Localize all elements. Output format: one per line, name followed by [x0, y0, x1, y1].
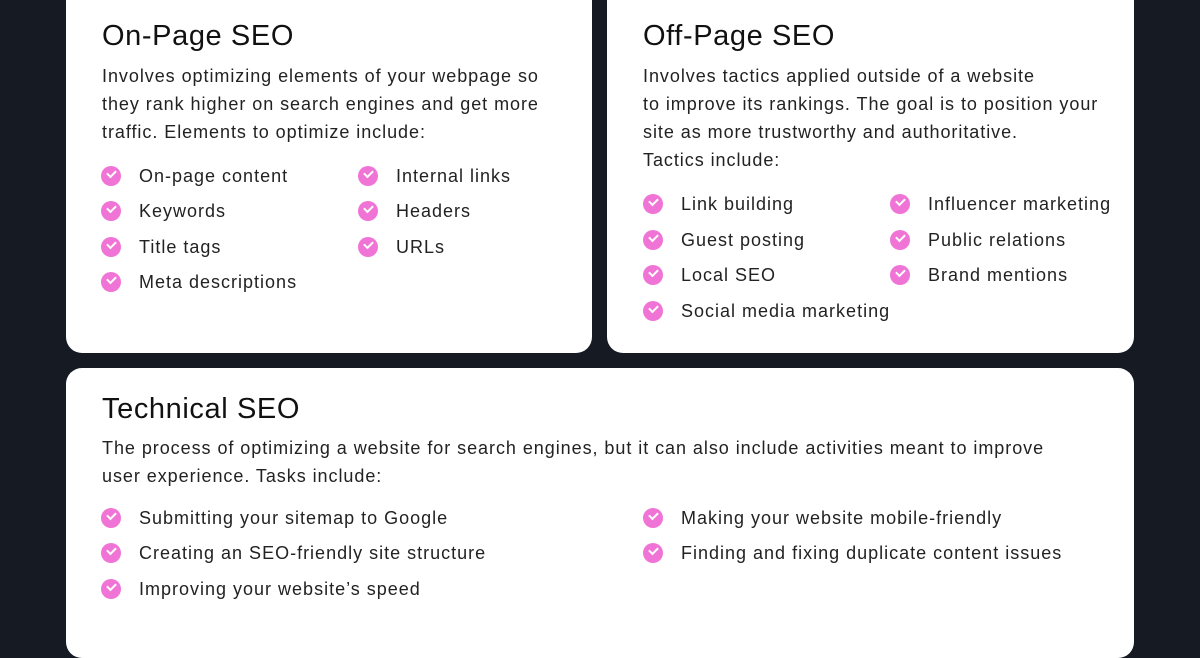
- list: technical tasks: Submitting your sitemap to Google: [139, 508, 448, 528]
- heading: Technical SEO: Technical SEO: [102, 393, 300, 425]
- panel: off-page SEO: [607, 0, 1134, 353]
- list: on-page elements: Title tags: [139, 237, 221, 257]
- list: technical tasks: Making your website mobile-friendly: [681, 508, 1002, 528]
- list: on-page elements: Keywords: [139, 201, 226, 221]
- list: on-page elements: URLs: [396, 237, 445, 257]
- list: on-page elements: Meta descriptions: [139, 272, 297, 292]
- list: off-page tactics: Public relations: [928, 230, 1066, 250]
- text: technical description: [102, 438, 1044, 486]
- list: off-page tactics: [643, 194, 1111, 321]
- list: off-page tactics: Local SEO: [681, 265, 776, 285]
- list: off-page tactics: Link building: [681, 194, 794, 214]
- text: technical description: user experience. Tasks include:: [102, 466, 382, 486]
- list: on-page elements: Headers: [396, 201, 471, 221]
- list: off-page tactics: Social media marketing: [681, 301, 890, 321]
- list: off-page tactics: Guest posting: [681, 230, 805, 250]
- text: off-page description: [643, 66, 1098, 170]
- text: off-page description: Tactics include:: [643, 150, 780, 170]
- heading: Off-Page SEO: Off-Page SEO: [643, 20, 835, 52]
- text: off-page description: Involves tactics applied outside of a website: [643, 66, 1035, 86]
- panel: on-page SEO: [66, 0, 592, 353]
- text: technical description: The process of optimizing a website for search engines, but it can also include activities meant to improve: [102, 438, 1044, 458]
- list: technical tasks: Improving your website’s speed: [139, 579, 421, 599]
- text: off-page description: site as more trustworthy and authoritative.: [643, 122, 1018, 142]
- text: on-page description: [102, 66, 539, 142]
- list: on-page elements: On-page content: [139, 166, 288, 186]
- text: off-page description: to improve its rankings. The goal is to position your: [643, 94, 1098, 114]
- text: on-page description: Involves optimizing elements of your webpage so: [102, 66, 539, 86]
- panel: technical SEO: [66, 368, 1134, 658]
- heading: On-Page SEO: On-Page SEO: [102, 20, 294, 52]
- list: technical tasks: Finding and fixing duplicate content issues: [681, 543, 1062, 563]
- list: technical tasks: Creating an SEO-friendly site structure: [139, 543, 486, 563]
- text: on-page description: traffic. Elements to optimize include:: [102, 122, 426, 142]
- list: on-page elements: [101, 166, 511, 292]
- text: on-page description: they rank higher on search engines and get more: [102, 94, 539, 114]
- list: technical tasks: [101, 508, 1062, 599]
- list: off-page tactics: Brand mentions: [928, 265, 1068, 285]
- list: on-page elements: Internal links: [396, 166, 511, 186]
- list: off-page tactics: Influencer marketing: [928, 194, 1111, 214]
